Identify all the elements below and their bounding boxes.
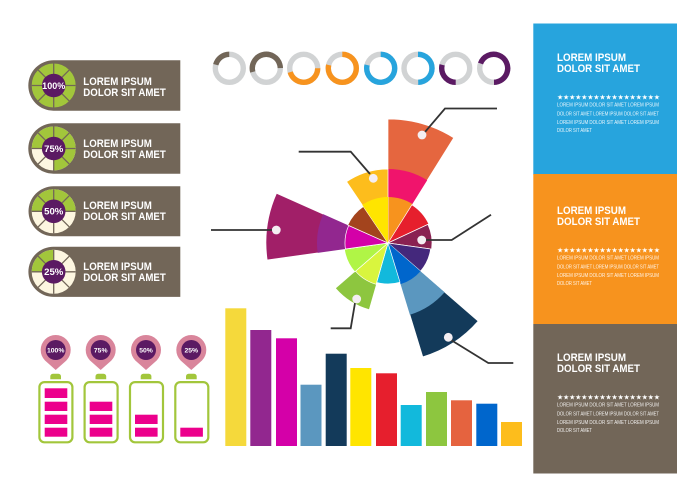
- gauge: 25%: 25%: [44, 267, 64, 278]
- battery: 50%: [130, 335, 163, 442]
- battery: 75%: [85, 335, 118, 442]
- label: LOREM IPSUM: [83, 200, 152, 212]
- body text: [557, 94, 660, 134]
- body text: ★★★★★★★★★★★★★★★★★: [557, 247, 660, 255]
- battery: 100%: 100%: [47, 347, 64, 354]
- heading: LOREM IPSUM: [557, 52, 626, 64]
- banner: 25%: DOLOR SIT AMET: [83, 272, 166, 284]
- battery: 100%: [39, 335, 72, 442]
- banner: 75%: [28, 123, 180, 174]
- battery: 25%: 25%: [184, 347, 198, 354]
- gauge: 75%: 75%: [44, 144, 64, 155]
- battery: 75%: 75%: [94, 347, 108, 354]
- gauge: 50%: [32, 189, 76, 233]
- body text: [557, 247, 660, 287]
- gauge: 100%: 100%: [42, 81, 65, 91]
- callout: navy wedge: [444, 333, 513, 363]
- body text: DOLOR SIT AMET LOREM IPSUM DOLOR SIT AMET: [557, 412, 660, 418]
- gauge: 100%: [32, 64, 76, 108]
- body text: LOREM IPSUM DOLOR SIT AMET LOREM IPSUM: [557, 256, 659, 262]
- gauge: 75%: [32, 126, 76, 170]
- panel: brown: [533, 324, 677, 474]
- banner: 100%: DOLOR SIT AMET: [83, 87, 166, 99]
- body text: [557, 394, 660, 434]
- heading: [557, 352, 640, 375]
- banner: 25%: [28, 247, 180, 297]
- heading: DOLOR SIT AMET: [557, 216, 640, 228]
- callout: small plum wedge: [417, 215, 491, 244]
- callout: plum wedge: [211, 226, 281, 234]
- panel: orange: [533, 174, 677, 324]
- battery: 25%: [175, 335, 208, 442]
- body text: LOREM IPSUM DOLOR SIT AMET LOREM IPSUM: [557, 273, 659, 279]
- bar chart: [225, 308, 522, 446]
- body text: LOREM IPSUM DOLOR SIT AMET LOREM IPSUM: [557, 103, 659, 109]
- body text: DOLOR SIT AMET LOREM IPSUM DOLOR SIT AMET: [557, 264, 660, 270]
- body text: ★★★★★★★★★★★★★★★★★: [557, 394, 660, 402]
- panel: blue: [533, 24, 677, 174]
- callout: amber wedge: [299, 152, 378, 183]
- heading: [557, 205, 640, 228]
- heading: LOREM IPSUM: [557, 205, 626, 217]
- label: LOREM IPSUM: [83, 261, 152, 273]
- body text: DOLOR SIT AMET LOREM IPSUM DOLOR SIT AMET: [557, 112, 660, 118]
- callout: green wedge: [331, 295, 361, 328]
- heading: DOLOR SIT AMET: [557, 363, 640, 375]
- body text: LOREM IPSUM DOLOR SIT AMET LOREM IPSUM: [557, 420, 659, 426]
- heading: LOREM IPSUM: [557, 352, 626, 364]
- body text: DOLOR SIT AMET: [557, 428, 593, 434]
- body text: LOREM IPSUM DOLOR SIT AMET LOREM IPSUM: [557, 403, 659, 409]
- label: LOREM IPSUM: [83, 76, 152, 88]
- battery: 50%: 50%: [139, 347, 153, 354]
- heading: [557, 52, 640, 75]
- body text: DOLOR SIT AMET: [557, 281, 593, 287]
- body text: ★★★★★★★★★★★★★★★★★: [557, 94, 660, 102]
- callout: top coral wedge: [418, 108, 497, 139]
- polar area chart: [266, 119, 478, 357]
- banner: 50%: [29, 186, 180, 236]
- gauge: 25%: [32, 250, 76, 294]
- gauge: 50%: 50%: [44, 207, 64, 218]
- banner: 50%: DOLOR SIT AMET: [83, 211, 166, 223]
- label: LOREM IPSUM: [83, 138, 152, 150]
- heading: DOLOR SIT AMET: [557, 63, 640, 75]
- banner: 75%: DOLOR SIT AMET: [83, 149, 166, 161]
- donut row: [212, 50, 512, 86]
- body text: DOLOR SIT AMET: [557, 128, 593, 134]
- banner: 100%: [28, 60, 180, 111]
- body text: LOREM IPSUM DOLOR SIT AMET LOREM IPSUM: [557, 120, 659, 126]
